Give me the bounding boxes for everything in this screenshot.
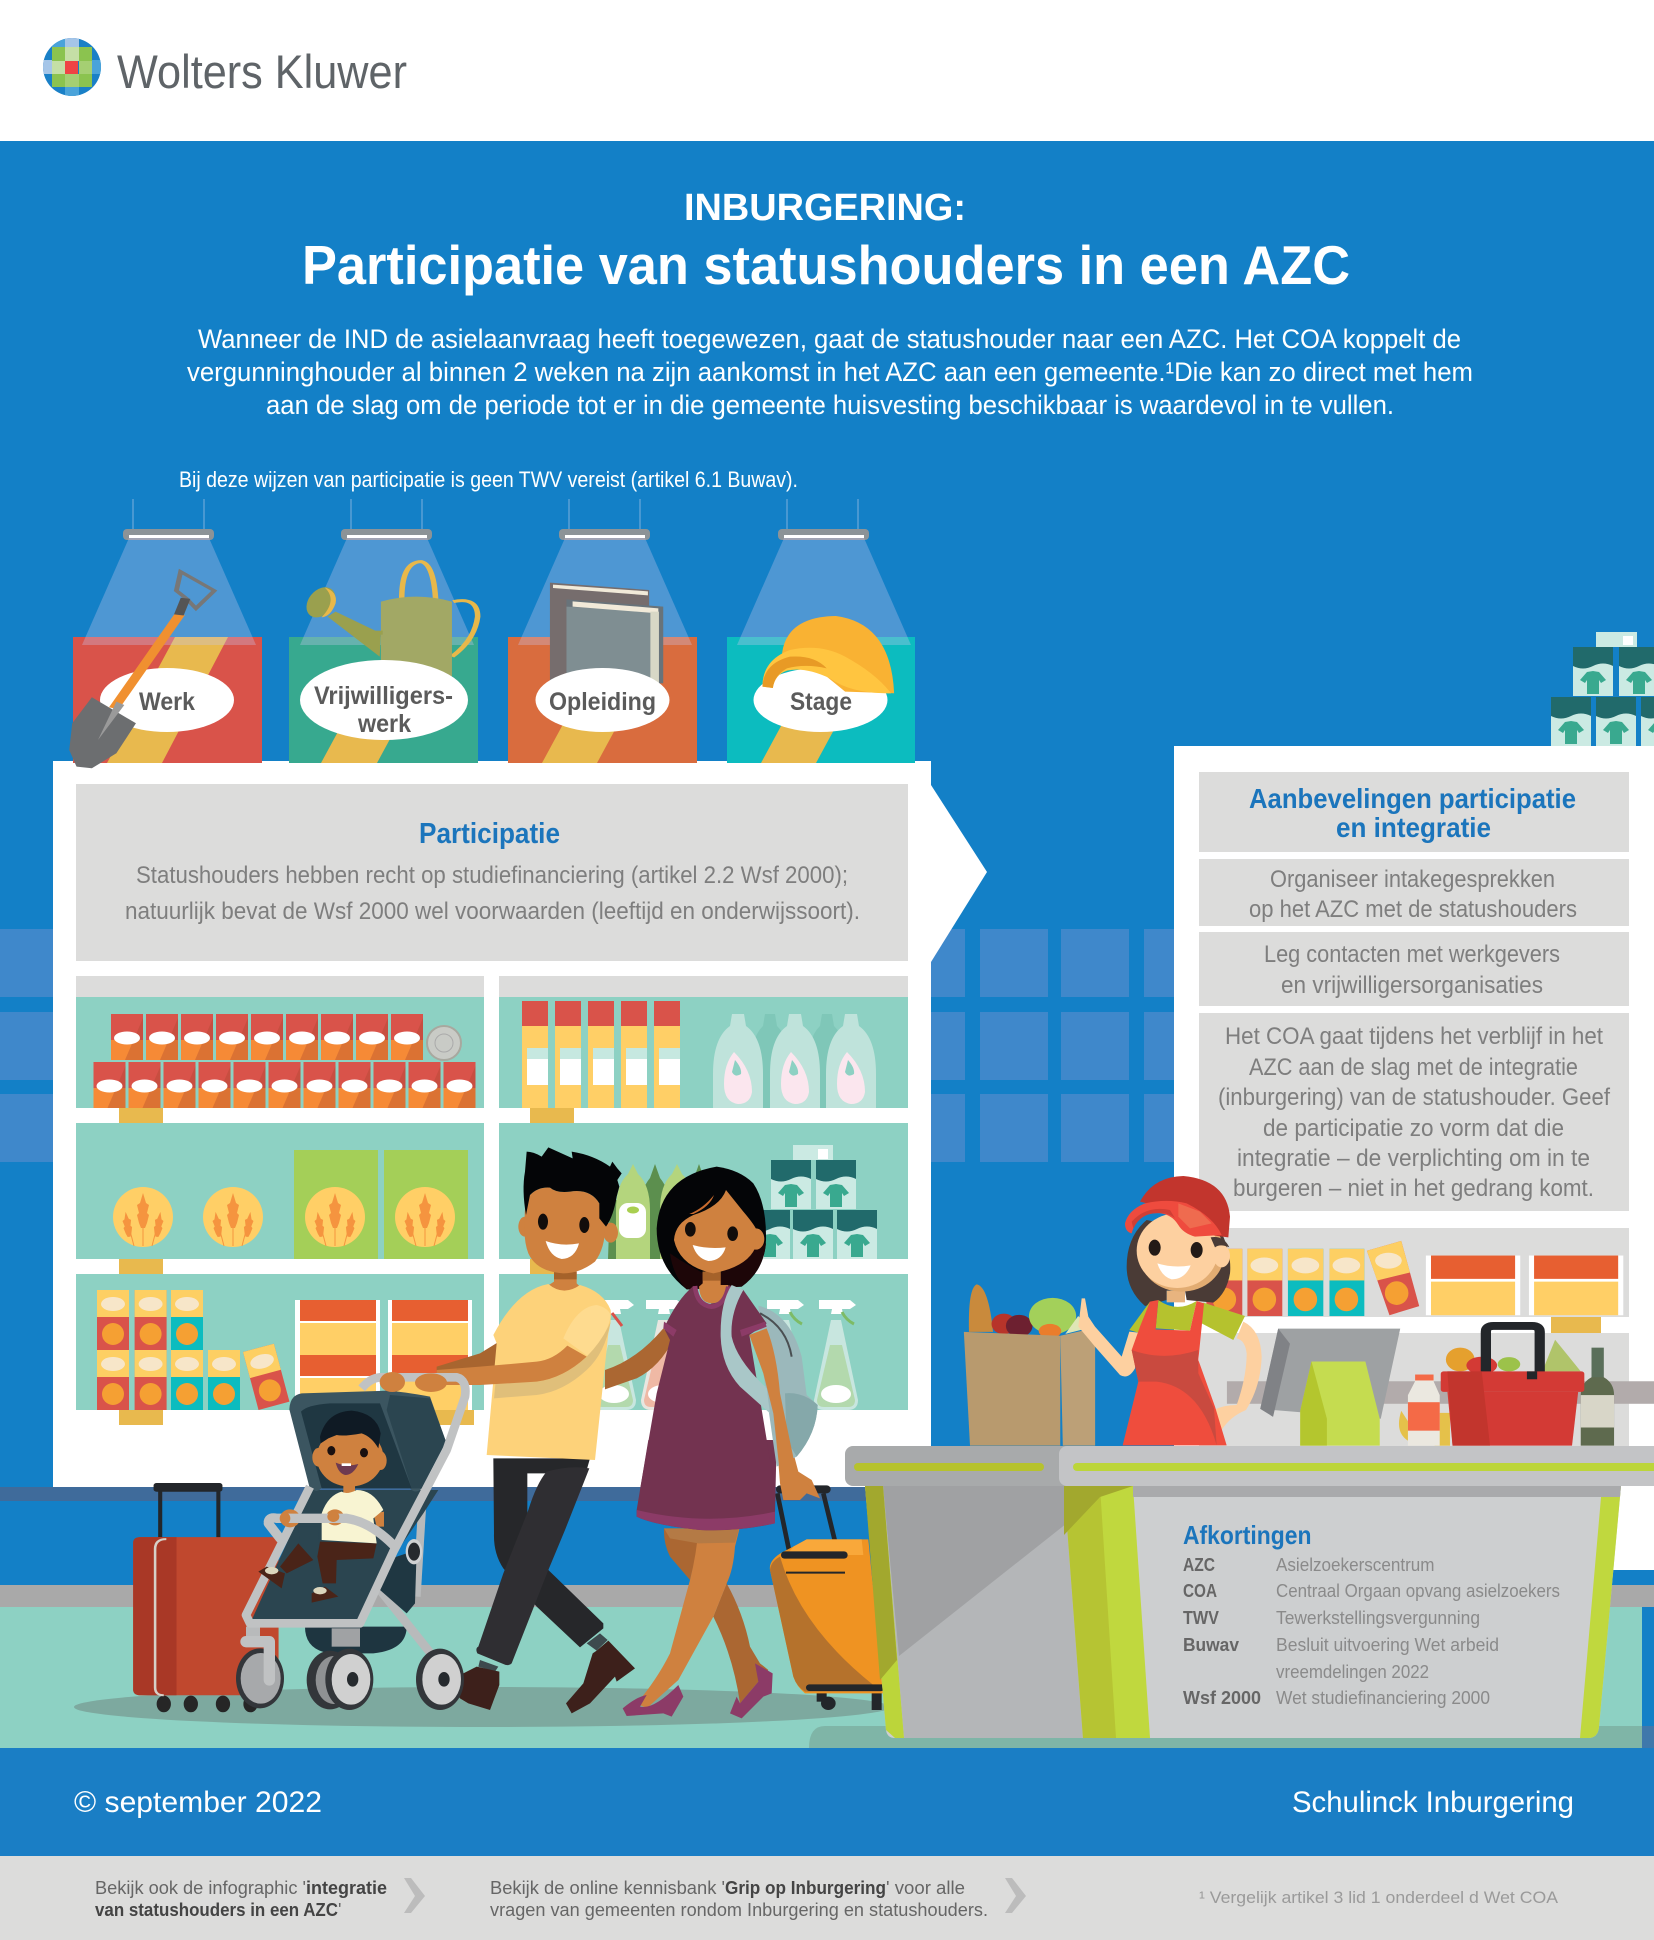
cash register — [1260, 1329, 1400, 1446]
shirts on top of panel — [1551, 632, 1654, 746]
logo — [43, 38, 407, 98]
woman — [640, 1167, 818, 1490]
blue footer band — [0, 1748, 1654, 1856]
blue footer band: Schulinck Inburgering — [1292, 1786, 1574, 1819]
man — [437, 1147, 674, 1460]
man legs — [457, 1458, 635, 1713]
intro paragraph — [187, 324, 1473, 420]
intro paragraph: vergunninghouder al binnen 2 weken na zijn aankomst in het AZC aan een gemeente.¹Die kan zo direct met hem — [187, 357, 1473, 387]
products on shelf behind cashier — [1206, 1241, 1623, 1316]
afkortingen: vreemdelingen 2022 — [1276, 1662, 1429, 1682]
link: Grip op Inburgering: Bekijk de online kennisbank ' — [490, 1878, 725, 1898]
icon: books — [550, 583, 663, 688]
products: wheat boxes — [113, 1150, 468, 1259]
icon: shovel — [69, 572, 214, 768]
heading box: Aanbevelingen participatie — [1249, 783, 1576, 814]
recommendation 3: Het COA gaat tijdens het verblijf in het — [1225, 1023, 1603, 1050]
link: Grip op Inburgering: vragen van gemeenten rondom Inburgering en statushouders. — [490, 1900, 988, 1920]
panel: participatie shelf — [53, 761, 987, 1487]
checkout items — [964, 1241, 1654, 1446]
counter — [845, 1446, 1654, 1738]
icon: cap — [762, 616, 894, 693]
icon: logo globe — [43, 38, 101, 96]
cashier — [1078, 1176, 1262, 1445]
recommendation 2 — [1199, 932, 1629, 1006]
products: cans — [94, 1014, 476, 1108]
link: integratie: integratie — [306, 1878, 387, 1898]
products: spray bottles — [592, 1300, 858, 1410]
recommendation 3: (inburgering) van de statushouder. Geef — [1218, 1084, 1610, 1111]
afkortingen: AZC — [1183, 1555, 1215, 1575]
afkortingen: Besluit uitvoering Wet arbeid — [1276, 1635, 1499, 1655]
link: Grip op Inburgering: ' voor alle — [886, 1878, 965, 1898]
panel: aanbevelingen — [1174, 632, 1654, 1570]
recommendation 2: Leg contacten met werkgevers — [1264, 941, 1560, 968]
display: Vrijwilligerswerk: Vrijwilligers- — [314, 682, 453, 710]
link: Grip op Inburgering: Grip op Inburgering — [725, 1878, 886, 1898]
grey bar — [1227, 1381, 1654, 1404]
product display boxes with lamps — [69, 499, 915, 768]
link: Grip op Inburgering — [490, 1878, 988, 1920]
intro paragraph: Wanneer de IND de asielaanvraag heeft toegewezen, gaat de statushouder naar een AZC. Het COA koppelt de — [198, 324, 1461, 354]
participatie text box: Statushouders hebben recht op studiefinanciering (artikel 2.2 Wsf 2000); — [136, 862, 848, 889]
wine bottle — [1581, 1348, 1614, 1446]
heading: Participatie van statushouders in een AZC — [302, 234, 1350, 296]
display: Vrijwilligerswerk — [289, 499, 478, 763]
recommendation 3: de participatie zo vorm dat die — [1263, 1115, 1564, 1142]
arrow: chevron 2 — [1005, 1878, 1026, 1913]
shopping basket — [1441, 1326, 1584, 1446]
afkortingen: Wsf 2000 — [1183, 1688, 1261, 1708]
display: Opleiding: Opleiding — [549, 688, 656, 716]
woman legs and hem — [623, 1440, 820, 1718]
products: detergent and shirts — [608, 1145, 877, 1259]
display: Stage: Stage — [790, 688, 852, 716]
wheels — [236, 1627, 464, 1710]
products: crackers — [97, 1290, 289, 1410]
recommendation 1: op het AZC met de statushouders — [1249, 896, 1577, 923]
link: integratie: Bekijk ook de infographic ' — [95, 1878, 306, 1898]
afkortingen: Centraal Orgaan opvang asielzoekers — [1276, 1581, 1560, 1601]
child — [258, 1411, 393, 1603]
participatie text box: Participatie — [419, 818, 560, 850]
arrow — [931, 785, 987, 962]
afkortingen: Tewerkstellingsvergunning — [1276, 1608, 1480, 1628]
stroller with child — [236, 1377, 465, 1710]
counter top — [845, 1446, 1654, 1486]
shelves — [76, 976, 908, 1425]
afkortingen: Afkortingen — [1183, 1520, 1312, 1550]
arrow: chevron 1 — [404, 1878, 425, 1913]
orange suitcase — [770, 1489, 883, 1710]
display: Opleiding — [508, 499, 697, 763]
heading box — [1199, 772, 1629, 852]
bottle and bananas — [1399, 1375, 1450, 1446]
right shelves — [1199, 1228, 1629, 1446]
participatie text box — [76, 784, 908, 961]
afkortingen — [1183, 1520, 1560, 1708]
afkortingen: Wet studiefinanciering 2000 — [1276, 1688, 1490, 1708]
heading — [302, 187, 1350, 296]
icon: watering can — [302, 562, 478, 677]
legs, orange suitcase and shoes — [457, 1440, 883, 1718]
red suitcase — [133, 1483, 279, 1712]
afkortingen: Buwav — [1183, 1635, 1239, 1655]
afkortingen: Asielzoekerscentrum — [1276, 1555, 1434, 1575]
counter body — [865, 1486, 1621, 1738]
link: integratie: ' — [338, 1900, 341, 1920]
link: integratie — [95, 1878, 387, 1920]
recommendation 1: Organiseer intakegesprekken — [1270, 866, 1555, 893]
recommendation 3: integratie – de verplichting om in te — [1237, 1145, 1590, 1172]
participatie text box: natuurlijk bevat de Wsf 2000 wel voorwaarden (leeftijd en onderwijssoort). — [125, 898, 860, 925]
paper bag with groceries — [964, 1284, 1095, 1446]
recommendation 3: burgeren – niet in het gedrang komt. — [1233, 1175, 1594, 1202]
recommendation 2: en vrijwilligersorganisaties — [1281, 972, 1543, 999]
logo wordmark: Wolters Kluwer — [117, 45, 407, 98]
afkortingen: TWV — [1183, 1608, 1219, 1628]
luggage and family — [133, 1147, 883, 1718]
link: integratie: van statushouders in een AZC — [95, 1900, 338, 1920]
grey footer — [0, 1856, 1654, 1940]
man and woman upper bodies — [437, 1147, 818, 1490]
afkortingen: COA — [1183, 1581, 1217, 1601]
display: Stage — [727, 499, 915, 763]
recommendation 3: AZC aan de slag met de integratie — [1249, 1054, 1578, 1081]
products: yellow boxes and bottles — [522, 1001, 876, 1108]
man's hands on stroller handle — [380, 1372, 447, 1392]
display: Werk — [69, 499, 262, 768]
display: Werk: Werk — [139, 688, 195, 716]
blue footer band: © september 2022 — [74, 1786, 322, 1819]
display: Vrijwilligerswerk: werk — [357, 710, 411, 738]
footnote: ¹ Vergelijk artikel 3 lid 1 onderdeel d Wet COA — [1199, 1888, 1559, 1907]
recommendation 3 — [1199, 1013, 1629, 1211]
intro paragraph: aan de slag om de periode tot er in die gemeente huisvesting beschikbaar is waardevol in te vullen. — [266, 390, 1394, 420]
heading box: en integratie — [1336, 812, 1491, 843]
heading: INBURGERING: — [684, 187, 966, 229]
products: orange boxes — [295, 1300, 472, 1410]
TWV note: Bij deze wijzen van participatie is geen TWV vereist (artikel 6.1 Buwav). — [179, 467, 798, 492]
recommendation 1 — [1199, 859, 1629, 926]
